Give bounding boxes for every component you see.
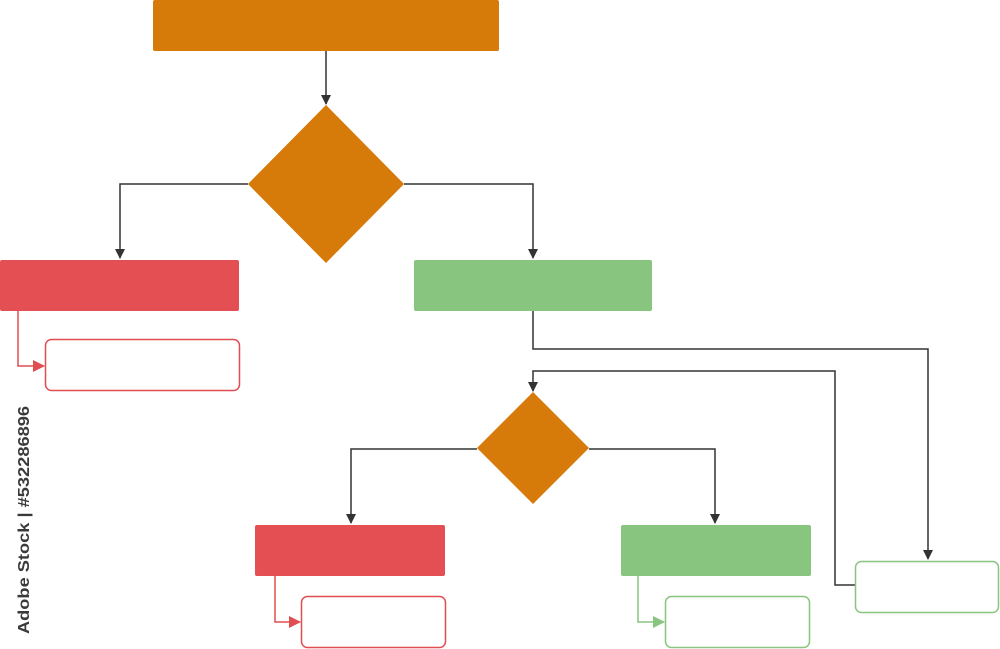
red connector 1 [18,311,44,366]
green connector 2 [638,576,664,622]
red outline box 2 [302,596,446,648]
top start box [153,0,499,51]
arrow: start to decision [325,51,327,104]
arrow: decision 2 to green [589,449,715,523]
decision diamond 2 [477,392,589,504]
arrow: decision 2 to red [351,449,477,523]
red box 1 [0,260,239,311]
red outline box 1 [46,340,240,390]
green box 2 [621,525,811,576]
green outline box 2 [666,596,810,648]
arrow: decision 1 to left red [120,184,248,258]
green box 1 [414,260,652,311]
red connector 2 [275,576,300,622]
arrow: green box 1 to right outline box [533,311,928,559]
vertical stock credit text: Adobe Stock | #532286896 [16,406,33,634]
decision diamond 1 [248,105,404,263]
arrow: loop back to decision 2 [533,371,855,585]
red box 2 [255,525,445,576]
arrow: decision 1 to right green [404,184,533,258]
green outline box right [856,562,998,612]
